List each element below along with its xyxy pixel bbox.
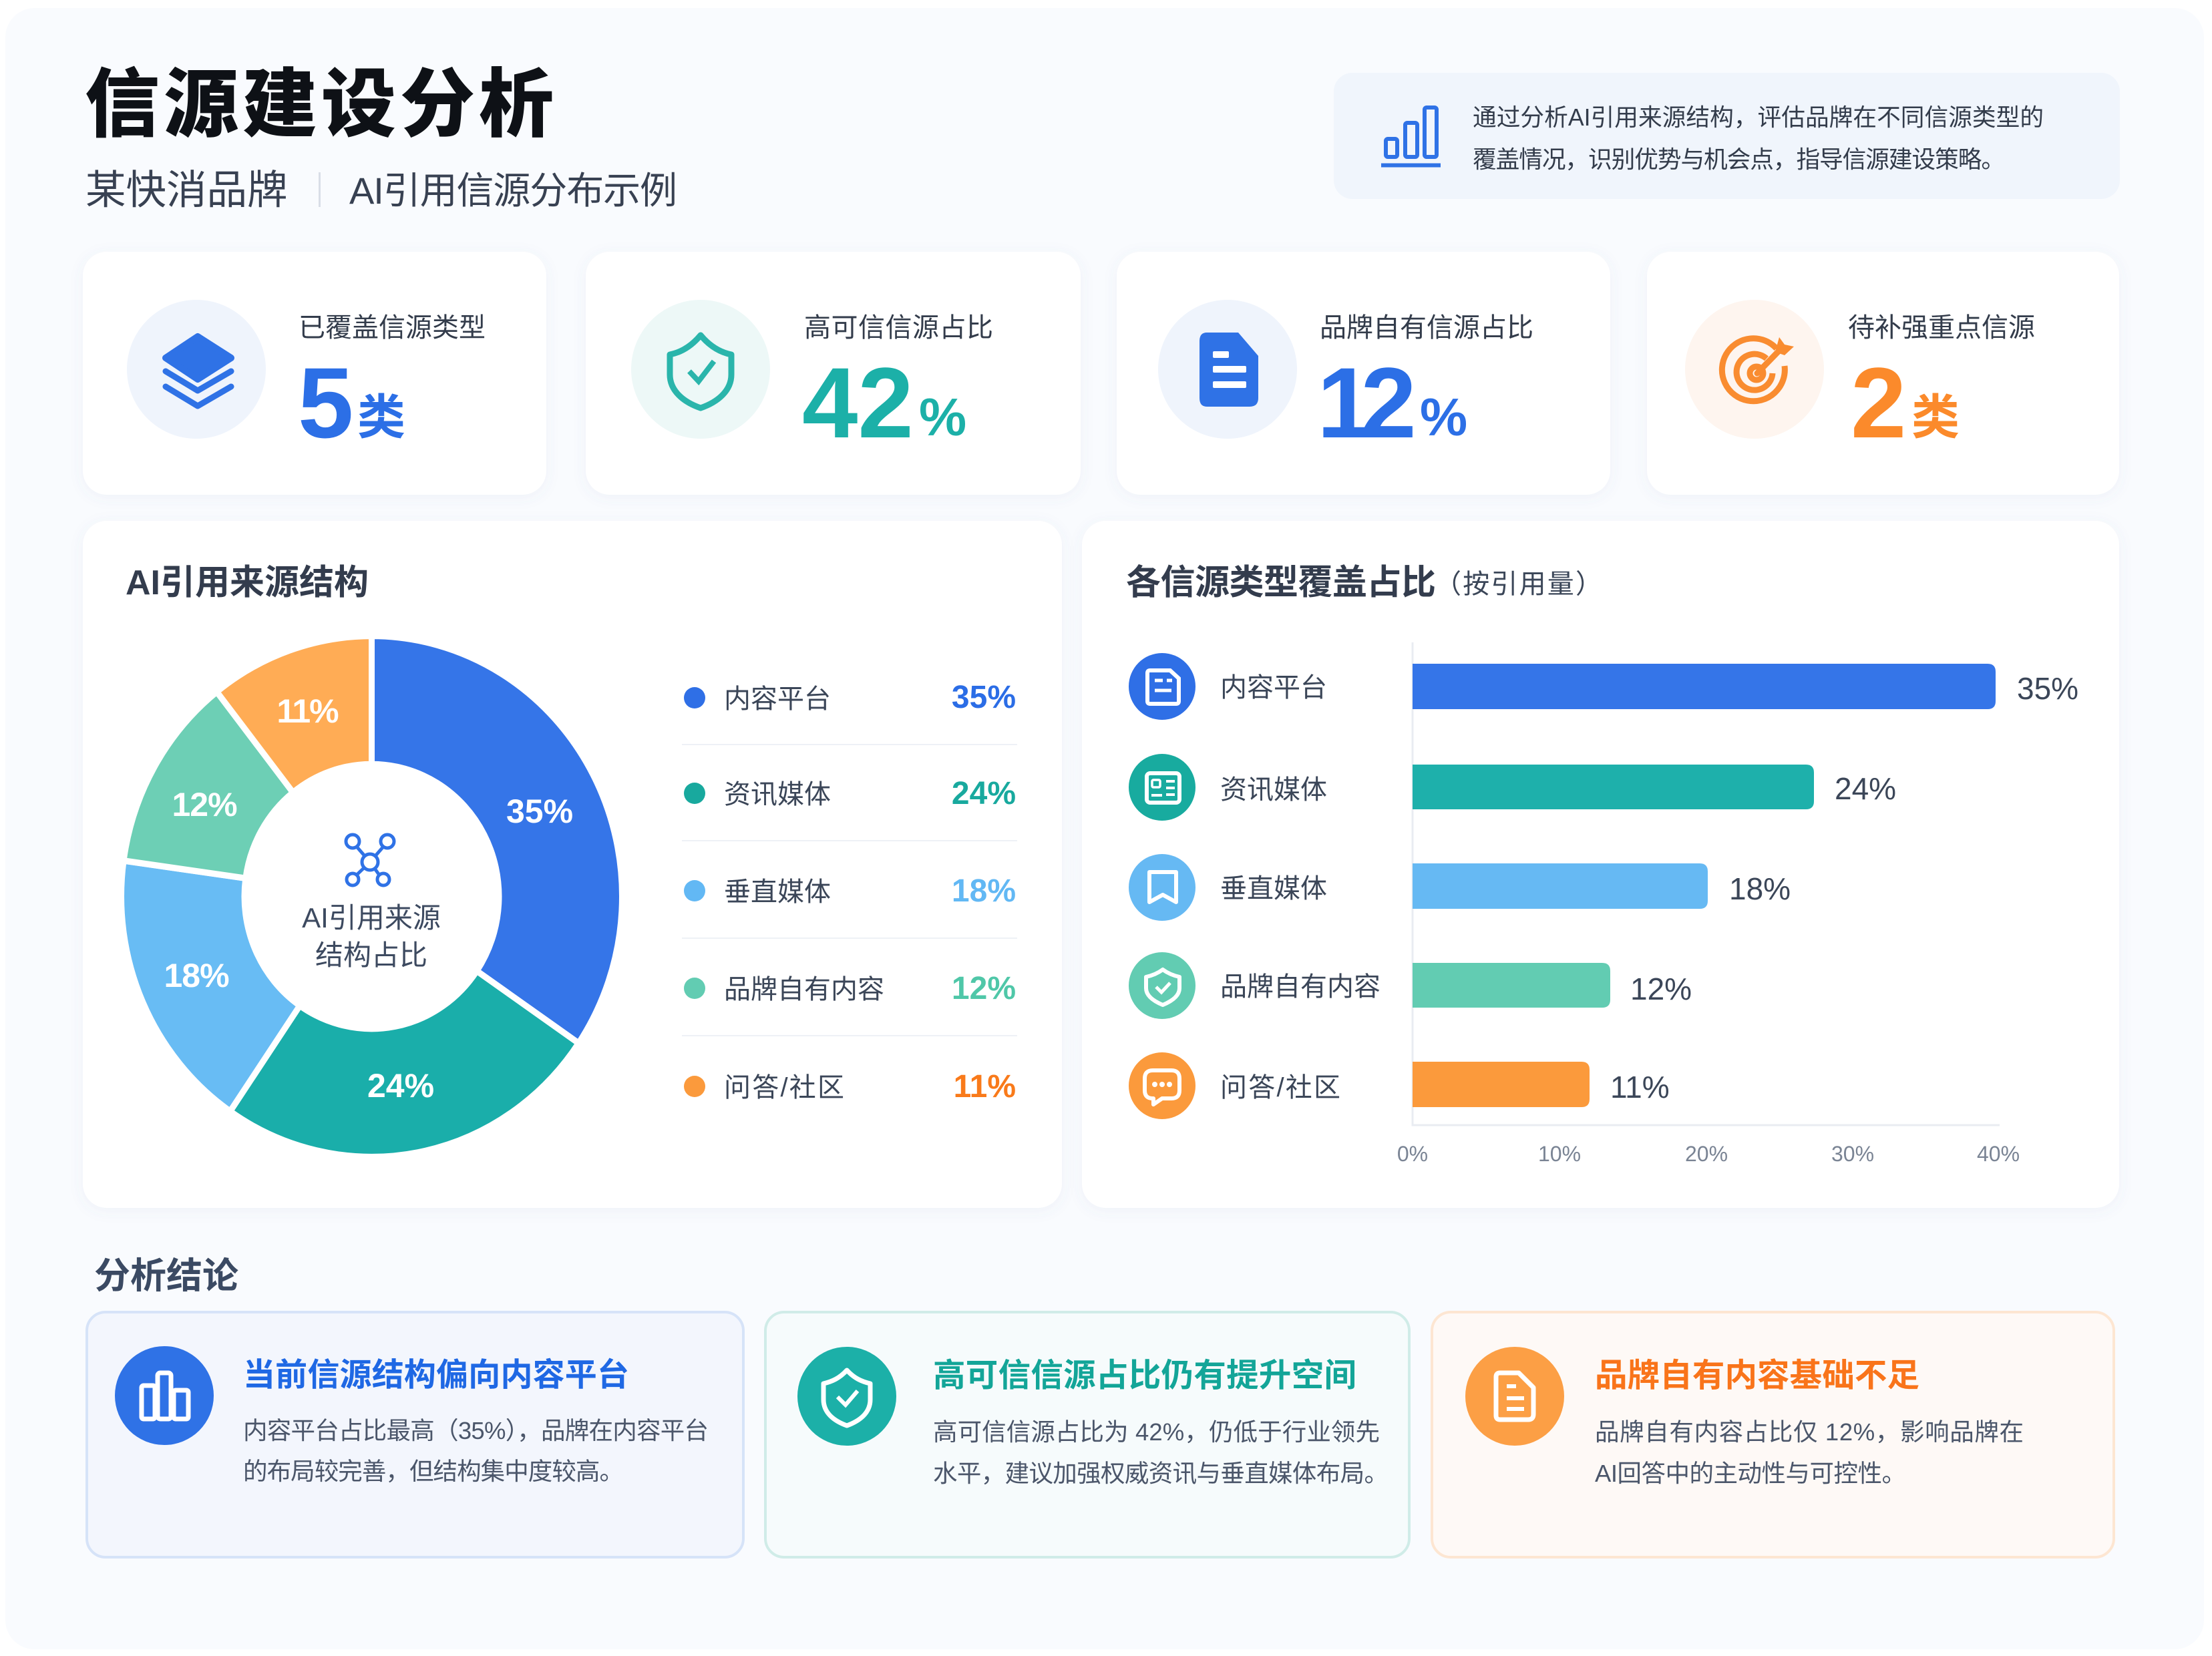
KPI card: high credibility xyxy=(586,252,1081,495)
title: 信源建设分析 xyxy=(85,63,558,146)
value xyxy=(1317,347,1467,459)
donut centre label xyxy=(302,902,441,971)
section heading: conclusions: 分析结论 xyxy=(94,1256,238,1296)
donut value labels: 11% xyxy=(276,692,339,730)
bar: brand owned xyxy=(1413,963,1692,1008)
bar: Q&A community: 11% xyxy=(1610,1070,1670,1104)
row: Q&A community xyxy=(1129,1052,1340,1119)
body: 内容平台占比最高（35%），品牌在内容平台 xyxy=(243,1417,709,1444)
label: 已覆盖信源类型 xyxy=(299,313,486,343)
icon: document xyxy=(1158,300,1297,439)
row: news media xyxy=(1129,754,1327,821)
heading xyxy=(1126,564,1602,602)
value: % xyxy=(919,387,966,447)
description text: 通过分析AI引用来源结构，评估品牌在不同信源类型的 xyxy=(1473,104,2044,131)
legend row: vertical media: 垂直媒体 xyxy=(724,877,831,907)
value: % xyxy=(1420,387,1467,447)
legend row: brand owned: 12% xyxy=(952,971,1016,1006)
heading: （按引用量） xyxy=(1435,570,1602,599)
description text xyxy=(1473,104,2044,173)
value: 类 xyxy=(357,391,405,445)
heading: 高可信信源占比仍有提升空间 xyxy=(933,1358,1356,1394)
legend row: news media: 资讯媒体 xyxy=(724,780,831,809)
x axis labels: 10% xyxy=(1538,1142,1581,1166)
heading: 品牌自有内容基础不足 xyxy=(1595,1358,1919,1394)
body xyxy=(1595,1418,2024,1487)
label: 待补强重点信源 xyxy=(1848,313,2035,343)
body: 水平，建议加强权威资讯与垂直媒体布局。 xyxy=(933,1460,1389,1487)
legend row: brand owned xyxy=(684,971,1016,1006)
value xyxy=(1851,347,1960,459)
row: content platform xyxy=(1129,653,1327,720)
conclusion card: owned content xyxy=(1432,1312,2114,1557)
heading: 各信源类型覆盖占比 xyxy=(1126,564,1436,602)
icon: bars xyxy=(115,1346,214,1445)
KPI card: covered types xyxy=(83,252,546,495)
value: 5 xyxy=(298,347,353,459)
legend xyxy=(682,680,1017,1104)
icon: shield xyxy=(631,300,770,439)
body: 品牌自有内容占比仅 12%，影响品牌在 xyxy=(1595,1418,2024,1446)
callout: description xyxy=(1334,73,2120,199)
bar chart xyxy=(1397,642,2078,1166)
icon: layers xyxy=(127,300,266,439)
conclusion card: credibility xyxy=(765,1312,1409,1557)
donut value labels: 35% xyxy=(506,793,573,830)
bar: Q&A community xyxy=(1413,1062,1670,1107)
donut centre label: AI引用来源 xyxy=(302,902,441,934)
body: AI回答中的主动性与可控性。 xyxy=(1595,1460,1906,1487)
bar: brand owned: 12% xyxy=(1630,972,1692,1006)
donut value labels: 18% xyxy=(164,957,229,994)
bar: content platform: 35% xyxy=(2017,671,2078,706)
bar: vertical media: 18% xyxy=(1729,871,1791,906)
legend row: vertical media: 18% xyxy=(952,873,1016,909)
legend row: Q&A community: 问答/社区 xyxy=(724,1073,844,1102)
legend row: content platform: 内容平台 xyxy=(724,684,831,714)
row: news media: 资讯媒体 xyxy=(1220,775,1327,805)
legend row: news media: 24% xyxy=(952,776,1016,811)
value: 2 xyxy=(1851,347,1906,459)
bar: vertical media xyxy=(1413,863,1791,909)
KPI card: own sources xyxy=(1117,252,1610,495)
icon: document xyxy=(1465,1347,1564,1446)
body: 高可信信源占比为 42%，仍低于行业领先 xyxy=(933,1418,1380,1446)
label: 高可信信源占比 xyxy=(804,313,993,343)
x axis labels: 40% xyxy=(1977,1142,2020,1166)
KPI card: to be strengthened xyxy=(1647,252,2119,495)
icon: target xyxy=(1685,300,1824,439)
donut chart xyxy=(122,636,622,1157)
heading: AI引用来源结构 xyxy=(126,564,369,602)
body: 的布局较完善，但结构集中度较高。 xyxy=(243,1458,624,1485)
x axis labels: 0% xyxy=(1397,1142,1428,1166)
panel: AI citation source structure xyxy=(83,521,1062,1208)
x axis labels: 30% xyxy=(1831,1142,1874,1166)
row: Q&A community: 问答/社区 xyxy=(1220,1073,1340,1102)
row: content platform: 内容平台 xyxy=(1220,673,1327,702)
description text: 覆盖情况，识别优势与机会点，指导信源建设策略。 xyxy=(1473,146,2005,173)
donut value labels xyxy=(164,692,573,1104)
donut centre label: 结构占比 xyxy=(315,940,427,971)
bar: content platform xyxy=(1413,664,2078,709)
conclusion card: content platform bias xyxy=(87,1312,743,1557)
legend row: content platform xyxy=(684,680,1016,715)
subtitle xyxy=(85,167,677,212)
row: vertical media: 垂直媒体 xyxy=(1220,874,1327,903)
row: vertical media xyxy=(1129,854,1327,921)
legend row: news media xyxy=(684,776,1016,811)
icon: network nodes xyxy=(346,835,394,885)
value xyxy=(802,347,966,459)
icon: shield xyxy=(797,1347,896,1446)
legend row: brand owned: 品牌自有内容 xyxy=(724,975,884,1004)
body xyxy=(243,1417,709,1485)
label: 品牌自有信源占比 xyxy=(1320,313,1533,343)
donut value labels: 12% xyxy=(172,786,237,823)
legend row: content platform: 35% xyxy=(952,680,1016,715)
subtitle: AI引用信源分布示例 xyxy=(349,170,677,212)
value: 类 xyxy=(1911,391,1960,445)
heading: 当前信源结构偏向内容平台 xyxy=(243,1358,629,1393)
x axis labels xyxy=(1397,1142,2020,1166)
legend row: vertical media xyxy=(684,873,1016,909)
header xyxy=(85,63,677,212)
value: 12 xyxy=(1317,347,1413,459)
donut value labels: 24% xyxy=(367,1067,434,1104)
value: 42 xyxy=(802,347,914,459)
panel: coverage by source type xyxy=(1082,521,2119,1208)
body xyxy=(933,1418,1389,1487)
value xyxy=(298,347,405,459)
icon: bar chart xyxy=(1381,108,1441,166)
row: brand owned: 品牌自有内容 xyxy=(1220,972,1380,1002)
legend row: Q&A community: 11% xyxy=(954,1069,1016,1104)
subtitle: 某快消品牌 xyxy=(85,167,287,212)
bar: news media: 24% xyxy=(1835,771,1896,806)
x axis labels: 20% xyxy=(1685,1142,1728,1166)
legend row: Q&A community xyxy=(684,1069,1016,1104)
bar: news media xyxy=(1413,765,1896,809)
row: brand owned xyxy=(1129,952,1380,1019)
